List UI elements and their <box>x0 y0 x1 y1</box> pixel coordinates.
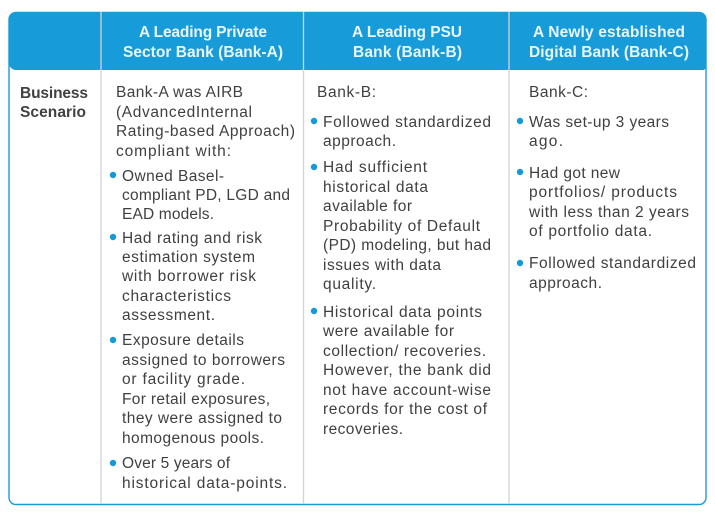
bullet: models: EAD models. <box>122 206 214 223</box>
column: Bank-A details <box>110 84 295 492</box>
bullet: rating system: assessment. <box>122 307 215 324</box>
bullet: history: historical data-points. <box>122 475 287 492</box>
bullet: rating system: Had rating and risk <box>122 230 262 247</box>
bullet: portfolios <box>517 165 689 240</box>
intro: Bank-A: Bank-A was AIRB <box>116 84 243 101</box>
bullet: PD data: quality. <box>323 276 376 293</box>
bullet: exposure details: or facility grade. <box>122 371 245 388</box>
intro: Bank-A: (AdvancedInternal <box>116 104 252 121</box>
bullet: age: ago. <box>529 133 563 150</box>
bullet: recoveries: Historical data points <box>323 304 482 321</box>
bullet: portfolios: of portfolio data. <box>529 223 652 240</box>
intro: Bank-A <box>116 84 295 160</box>
bullet: portfolios: portfolios/ products <box>529 184 677 201</box>
column: Bank-C details <box>517 84 696 292</box>
bullet: PD data: historical data <box>323 179 428 196</box>
bullet: PD data: Had sufficient <box>323 159 428 176</box>
bullet: standardized: approach. <box>529 275 602 292</box>
column: Bank-B details <box>311 84 491 438</box>
bullet: exposure details <box>110 332 285 447</box>
bullet: exposure details: they were assigned to <box>122 410 282 427</box>
bullet: exposure details: assigned to borrowers <box>122 352 285 369</box>
bullet: models <box>110 168 290 223</box>
header band <box>9 12 706 70</box>
bullet: approach: approach. <box>323 133 396 150</box>
row label: Business Scenario: Scenario <box>20 104 86 121</box>
bullet: standardized: Followed standardized <box>529 255 696 272</box>
header: Bank-A <box>123 24 283 61</box>
bullet: recoveries <box>311 304 491 438</box>
bullet: exposure details: For retail exposures, <box>122 391 270 408</box>
bullet: age <box>517 114 669 150</box>
bullet: models: compliant PD, LGD and <box>122 187 290 204</box>
column dividers <box>101 12 509 504</box>
bullet: exposure details: homogenous pools. <box>122 430 264 447</box>
bullet: history <box>110 455 287 492</box>
bullet: standardized <box>517 255 696 292</box>
header: Bank-C: A Newly established <box>533 24 685 41</box>
bullet: PD data <box>311 159 491 293</box>
bullet: PD data: Probability of Default <box>323 218 481 235</box>
bullet: rating system: with borrower risk <box>121 268 256 285</box>
bullet: rating system: estimation system <box>122 249 255 266</box>
bullet: portfolios: with less than 2 years <box>528 204 689 221</box>
bullet: PD data: available for <box>323 198 412 215</box>
bullet: PD data: issues with data <box>323 257 441 274</box>
bullet: recoveries: not have account-wise <box>323 382 491 399</box>
bullet: age: Was set-up 3 years <box>529 114 669 131</box>
bullet: PD data: (PD) modeling, but had <box>323 237 491 254</box>
bullet: portfolios: Had got new <box>529 165 621 182</box>
row label: Business Scenario <box>20 85 88 121</box>
intro: Bank-B: Bank-B: <box>317 84 376 101</box>
header: Bank-B: Bank (Bank-B) <box>353 44 462 61</box>
header: Bank-A: Sector Bank (Bank-A) <box>123 44 283 61</box>
header: Bank-C <box>529 24 689 61</box>
intro: Bank-A: compliant with: <box>116 143 231 160</box>
bullet: recoveries: records for the cost of <box>323 401 488 418</box>
bullet: models: Owned Basel- <box>122 168 224 185</box>
bullet: approach <box>311 114 491 150</box>
bullet: rating system <box>110 230 262 324</box>
header: Bank-B: A Leading PSU <box>352 24 462 41</box>
bullet: recoveries: However, the bank did <box>323 362 491 379</box>
header: Bank-A: A Leading Private <box>139 24 267 41</box>
bullet: rating system: characteristics <box>122 288 231 305</box>
bullet: exposure details: Exposure details <box>122 332 244 349</box>
bullet: recoveries: collection/ recoveries. <box>323 343 486 360</box>
intro: Bank-A: Rating-based Approach) <box>116 123 295 140</box>
bullet: recoveries: recoveries. <box>323 421 403 438</box>
bullet: approach: Followed standardized <box>323 114 491 131</box>
header: Bank-C: Digital Bank (Bank-C) <box>529 44 689 61</box>
intro: Bank-C: Bank-C: <box>529 84 588 101</box>
bullet: history: Over 5 years of <box>122 455 231 472</box>
header: Bank-B <box>352 24 462 61</box>
row label: Business Scenario: Business <box>20 85 88 102</box>
bullet: recoveries: were available for <box>322 323 454 340</box>
